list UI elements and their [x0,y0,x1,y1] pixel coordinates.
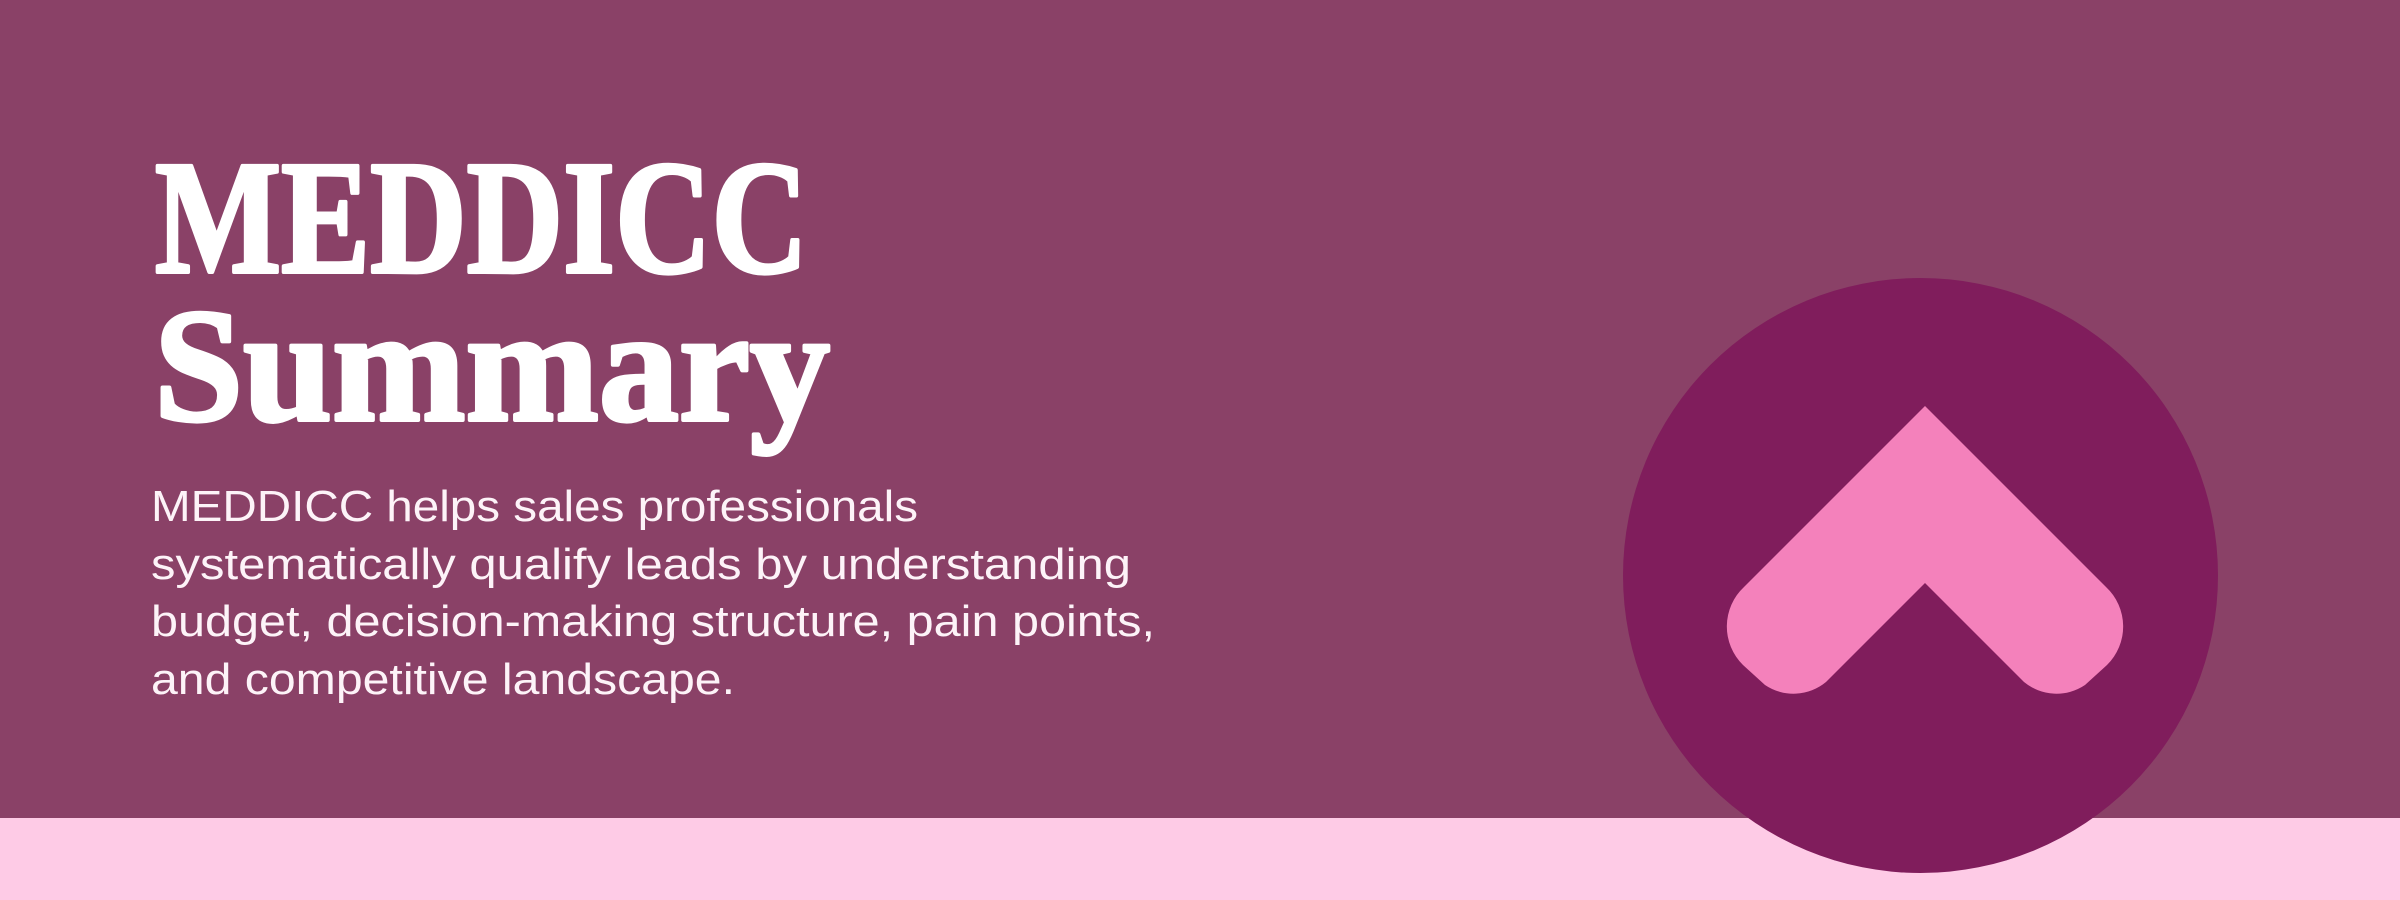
description text: MEDDICC helps sales professionals [151,482,918,531]
description text: systematically qualify leads by understanding [151,540,1131,589]
title: Summary [154,277,830,456]
description text: and competitive landscape. [151,655,735,704]
icon: upward chevron in circle [1623,278,2218,873]
title: MEDDICC [155,129,808,308]
bottom band [0,818,2400,900]
title [154,129,830,456]
description text: budget, decision-making structure, pain points, [151,597,1155,646]
icon: chevron [1727,406,2123,694]
icon circle [1623,278,2218,873]
description text [151,482,1155,704]
